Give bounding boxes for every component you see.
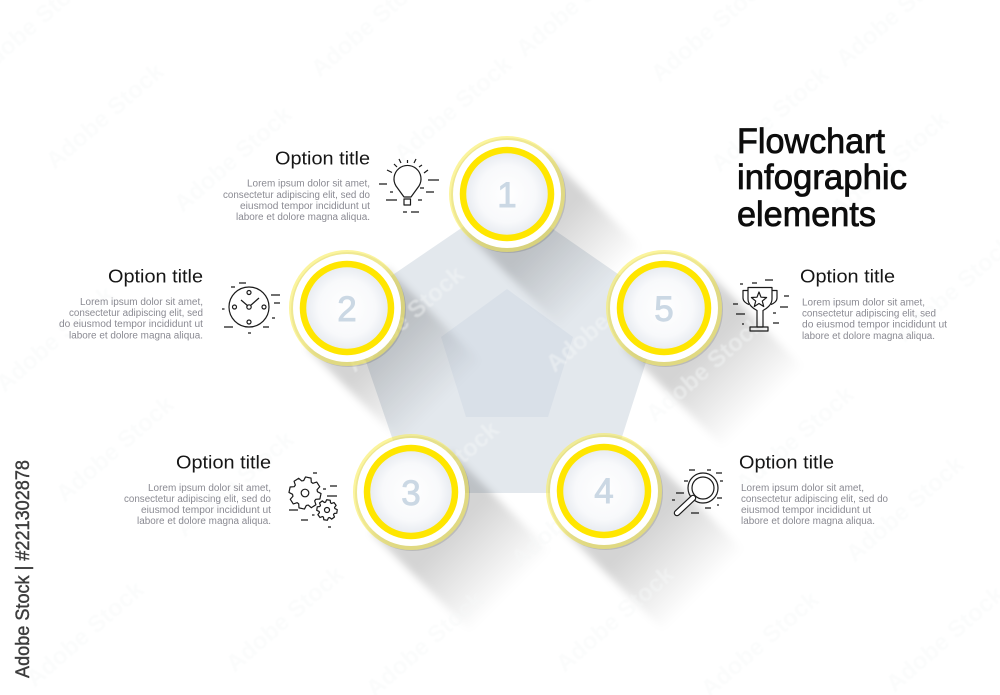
option 2 text: labore et dolore magna aliqua.: [69, 330, 203, 342]
icon: magnifier: [672, 470, 723, 513]
option 4 text: [739, 452, 888, 527]
option 1 text: consectetur adipiscing elit, sed do: [223, 190, 370, 201]
watermarks: Adobe Stock: [706, 61, 835, 178]
watermarks: Adobe Stock: [389, 51, 518, 168]
option 1 text: labore et dolore magna aliqua.: [236, 212, 370, 223]
circle 1: [449, 136, 566, 253]
watermarks: Adobe Stock: [506, 456, 635, 573]
option 5 text: consectetur adipiscing elit, sed: [802, 308, 936, 320]
option 2 text: consectetur adipiscing elit, sed: [69, 308, 203, 319]
watermarks: Adobe Stock: [826, 106, 955, 223]
option 3 text: consectetur adipiscing elit, sed do: [124, 494, 271, 505]
circle 4: [546, 433, 663, 550]
option 3 text: eiusmod tempor incididunt ut: [141, 505, 271, 516]
circle 5: 5: [654, 290, 674, 329]
circle 5: [606, 250, 723, 367]
option 4 text: consectetur adipiscing elit, sed do: [741, 494, 888, 505]
circle 3: 3: [401, 474, 421, 513]
heading: Flowchart: [737, 122, 885, 161]
watermarks: Adobe Stock: [41, 58, 170, 175]
option 3 text: Option title: [176, 452, 271, 472]
heading: infographic: [737, 158, 907, 197]
watermarks: Adobe Stock: [169, 101, 298, 218]
long shadows: [307, 154, 809, 637]
option 3 text: [124, 452, 271, 527]
circle 2: [289, 250, 406, 367]
watermarks: Adobe Stock: [731, 381, 860, 498]
watermarks: Adobe Stock: [21, 576, 150, 693]
option 4 text: eiusmod tempor incididunt ut: [741, 505, 871, 516]
circle 1: 1: [497, 176, 517, 215]
icon: gears: [286, 473, 338, 527]
outer pentagon: [347, 197, 664, 493]
watermarks: Adobe Stock: [51, 391, 180, 508]
option 5 text: Option title: [800, 266, 895, 286]
icon: trophy: [733, 280, 789, 331]
circle 3: [353, 434, 470, 551]
option 3 text: labore et dolore magna aliqua.: [137, 516, 271, 527]
icon: clock: [222, 283, 280, 333]
watermarks: Adobe Stock: [221, 561, 350, 678]
watermarks: Adobe Stock: [341, 261, 470, 378]
heading: [737, 122, 907, 234]
option 4 text: labore et dolore magna aliqua.: [741, 516, 875, 527]
option 5 text: do eiusmod tempor incididunt ut: [802, 320, 947, 330]
watermarks: Adobe Stock: [841, 451, 970, 568]
circle 2: 2: [337, 290, 357, 329]
icon: light bulb: [379, 159, 439, 212]
option 1 text: Lorem ipsum dolor sit amet,: [247, 178, 370, 190]
watermarks: Adobe Stock: [641, 311, 770, 428]
watermarks: Adobe Stock: [376, 416, 505, 533]
inner pentagon: [441, 289, 573, 417]
option 4 text: Option title: [739, 452, 834, 472]
circle 4: 4: [594, 472, 614, 511]
watermarks: Adobe Stock: [551, 561, 680, 678]
option 3 text: Lorem ipsum dolor sit amet,: [148, 483, 271, 494]
option 1 text: eiusmod tempor incididunt ut: [240, 201, 370, 212]
source credit: Adobe Stock | #221302878: [13, 460, 34, 678]
watermarks: Adobe Stock: [541, 261, 670, 378]
option 1 text: [223, 148, 370, 223]
heading: elements: [737, 195, 876, 234]
option 2 text: Option title: [108, 266, 203, 286]
option 5 text: [800, 266, 947, 342]
option 2 text: [59, 266, 203, 342]
option 5 text: labore et dolore magna aliqua.: [802, 331, 935, 342]
watermarks: Adobe Stock: [171, 426, 300, 543]
option 5 text: Lorem ipsum dolor sit amet,: [802, 298, 925, 308]
option 2 text: do eiusmod tempor incididunt ut: [59, 319, 203, 330]
option 4 text: Lorem ipsum dolor sit amet,: [741, 483, 864, 494]
option 1 text: Option title: [275, 148, 370, 168]
option 2 text: Lorem ipsum dolor sit amet,: [80, 297, 203, 308]
